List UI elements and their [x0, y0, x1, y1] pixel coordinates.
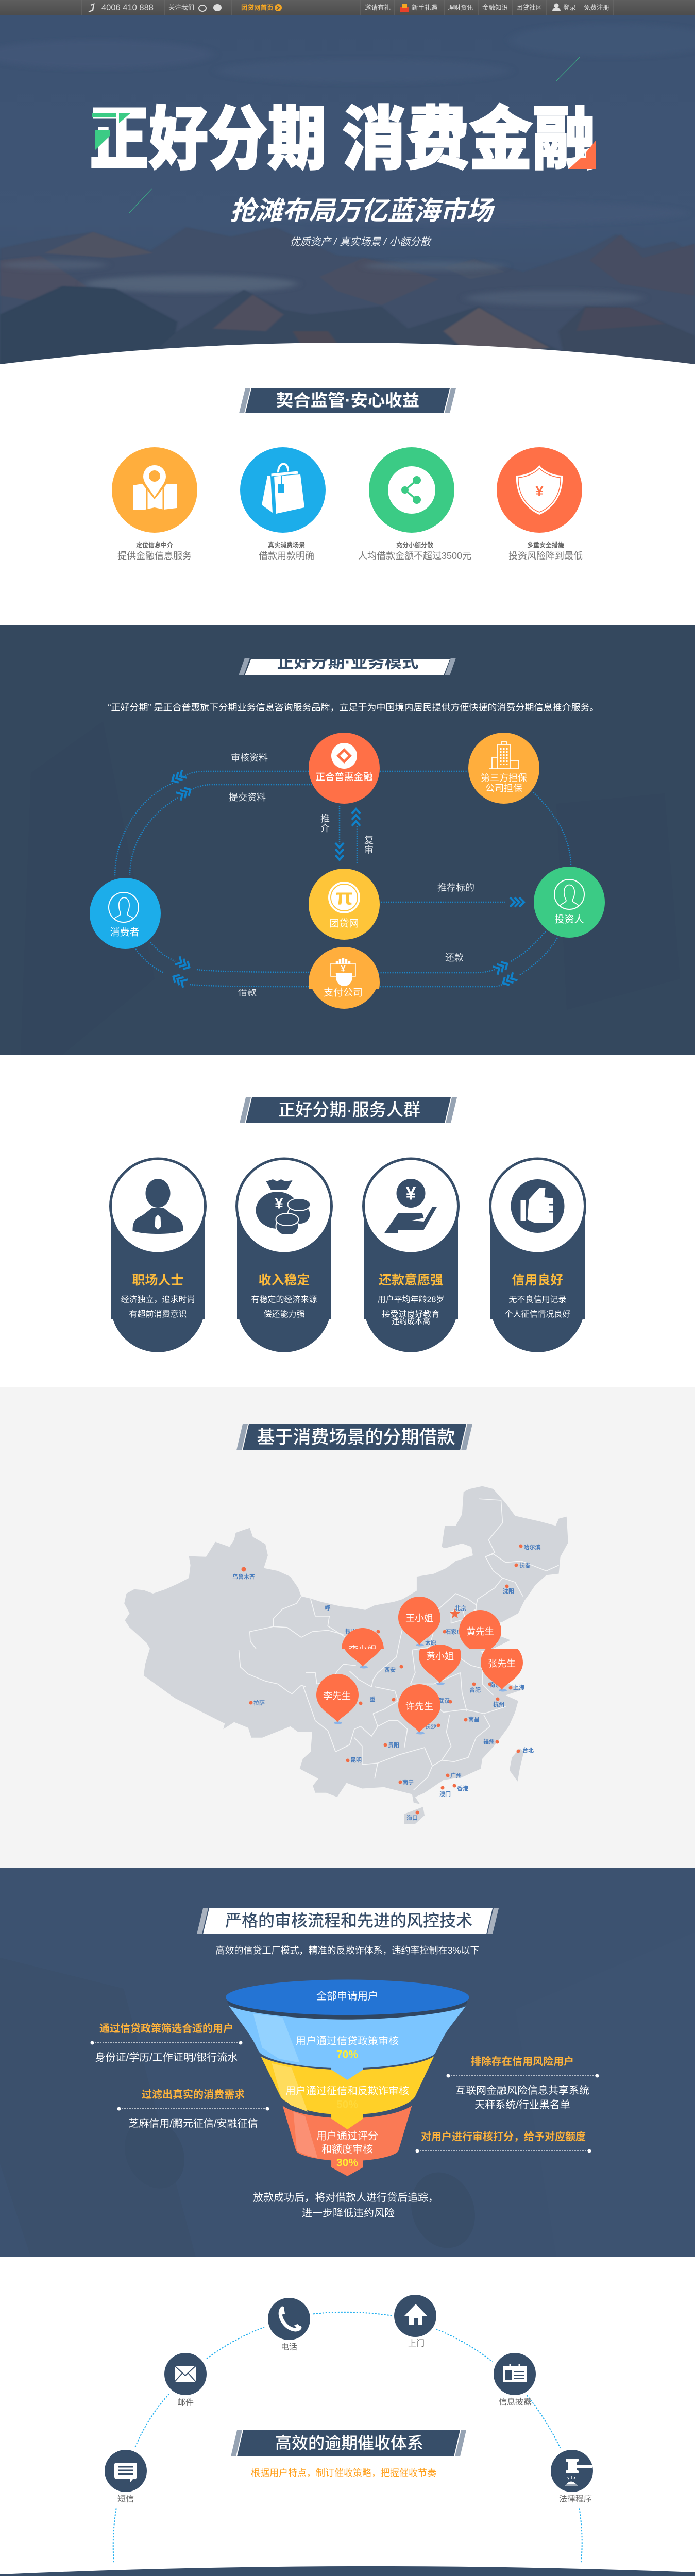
card: good credit	[490, 1159, 585, 1352]
flow labels: 还款	[445, 953, 464, 963]
text: location: 提供金融信息服务	[117, 551, 192, 561]
callout: scoring	[415, 2130, 591, 2153]
callout: exclude risk: 互联网金融风险信息共享系统	[455, 2084, 589, 2096]
text: real scenes: 借款用款明确	[259, 551, 314, 561]
node: third party guarantor: 第三方担保	[481, 773, 527, 783]
method: legal	[551, 2450, 593, 2504]
funnel: 70%	[336, 2048, 358, 2061]
city markers: 长沙	[425, 1723, 436, 1730]
heading banner: 正好分期·业务模式	[277, 653, 418, 671]
callout: real demand: 过滤出真实的消费需求	[142, 2088, 245, 2100]
top navigation bar: 邀请有礼	[365, 4, 391, 11]
hero title: 正好分期	[90, 101, 327, 178]
pin: li sir	[316, 1674, 359, 1724]
city markers: 杭州	[493, 1701, 504, 1708]
pin: li miss	[342, 1628, 384, 1668]
funnel: 用户通过征信和反欺诈审核	[285, 2085, 409, 2097]
city markers: 南宁	[402, 1778, 414, 1786]
callout: exclude risk: 天秤系统/行业黑名单	[474, 2099, 570, 2111]
funnel: 30%	[336, 2157, 358, 2169]
city markers: 哈尔滨	[523, 1544, 541, 1551]
city markers: 广州	[450, 1772, 462, 1779]
icon: hand with yen: ¥	[405, 1183, 416, 1204]
flow labels: 审	[364, 845, 374, 855]
card: stable income: 偿还能力强	[263, 1310, 305, 1319]
city markers: 香港	[457, 1785, 468, 1792]
icon: hand with yen	[384, 1179, 437, 1233]
node: tuandai	[309, 869, 380, 940]
pin: zhang: 张先生	[488, 1658, 516, 1669]
icon: shopping bag	[240, 447, 326, 533]
closing text	[253, 2192, 438, 2219]
panel: hero	[0, 0, 695, 371]
intro paragraph: “正好分期” 是正合普惠旗下分期业务信息咨询服务品牌，立足于为中国境内居民提供方便快捷的消费分期信息推介服务。	[108, 703, 599, 713]
card: stable income	[237, 1159, 332, 1352]
icon: user	[552, 3, 561, 11]
icon: money bag: ¥	[275, 1195, 283, 1212]
heading banner: 正好分期·服务人群	[278, 1100, 420, 1119]
text: small diversified	[358, 541, 471, 561]
card: professionals: 经济独立，追求时尚	[121, 1295, 195, 1304]
node: tuandai: 团贷网	[329, 918, 359, 929]
city markers	[232, 1544, 541, 1821]
method: legal: 法律程序	[559, 2495, 592, 2504]
node: zhenghe puhui	[309, 733, 380, 804]
text: location: 定位信息中介	[136, 541, 173, 549]
method: visit: 上门	[408, 2339, 425, 2348]
pin: huang sir: 黄先生	[466, 1626, 494, 1637]
icon: businessman	[133, 1179, 183, 1234]
card: repayment willingness: 接受过良好教育	[382, 1310, 440, 1319]
icon: gift	[400, 4, 409, 12]
top navigation bar: 登录	[563, 4, 576, 11]
top navigation bar	[0, 0, 695, 15]
card: professionals	[110, 1159, 205, 1352]
china map	[124, 1486, 568, 1824]
city markers: 贵阳	[388, 1741, 399, 1749]
node: payment company: 支付公司	[324, 987, 363, 998]
panel: target customers	[109, 1097, 586, 1352]
method: sms	[105, 2450, 147, 2504]
hero title: 消费金融	[342, 101, 596, 178]
card: good credit: 信用良好	[512, 1273, 564, 1287]
icon: arrow circle	[275, 4, 282, 11]
flow labels: 复	[364, 835, 374, 845]
callout: scoring: 对用户进行审核打分，给予对应额度	[421, 2130, 586, 2143]
card: stable income: 有稳定的经济来源	[251, 1295, 317, 1304]
pin: wang	[398, 1597, 440, 1647]
card: good credit: 个人征信情况良好	[504, 1310, 571, 1319]
top navigation bar: 关注我们	[168, 4, 194, 11]
city markers: 呼	[325, 1605, 331, 1612]
text: real scenes	[259, 541, 314, 561]
city markers: 南昌	[468, 1716, 480, 1723]
panel: consumer scenario map	[0, 1387, 695, 1868]
method: disclosure: 信息披露	[499, 2398, 532, 2407]
flow labels	[229, 753, 474, 997]
flow lines	[115, 771, 571, 987]
icon: shield	[497, 447, 582, 533]
city markers: 南京	[489, 1681, 501, 1688]
callout: real demand: 芝麻信用/鹏元征信/安融征信	[128, 2117, 258, 2129]
callout: credit policy	[91, 2022, 242, 2063]
icon: money bag	[256, 1179, 310, 1235]
node: investor	[534, 867, 605, 938]
node: third party guarantor	[468, 733, 539, 804]
method: phone	[268, 2298, 310, 2351]
node: payment company: ¥	[341, 963, 346, 974]
panel: risk control funnel	[0, 1868, 695, 2257]
city markers: 澳门	[439, 1790, 451, 1798]
pin: huang sir	[459, 1610, 501, 1649]
callout: credit policy: 身份证/学历/工作证明/银行流水	[95, 2052, 238, 2063]
top navigation bar: 4006 410 888	[101, 3, 154, 12]
callout: real demand	[117, 2088, 269, 2129]
heading banner: 严格的审核流程和先进的风控技术	[225, 1911, 472, 1930]
pin: zhang	[481, 1649, 523, 1692]
top navigation bar: 理财资讯	[448, 4, 474, 11]
card: repayment willingness: 违约成本高	[392, 1317, 430, 1326]
flow labels: 提交资料	[229, 792, 266, 803]
card: stable income: 收入稳定	[258, 1273, 310, 1287]
city markers: 福州	[483, 1738, 495, 1745]
pin: huang miss	[419, 1645, 461, 1685]
callout: exclude risk: 排除存在信用风险用户	[471, 2055, 574, 2067]
icon: phone	[89, 4, 94, 12]
closing text: 放款成功后，将对借款人进行贷后追踪，	[253, 2192, 438, 2204]
node: tuandai: π	[335, 884, 353, 910]
panel: safety benefits	[0, 371, 695, 625]
top navigation bar: 团贷网首页	[241, 4, 274, 11]
city markers: 海口	[406, 1814, 418, 1821]
icon: map pin	[112, 447, 197, 533]
subtitle: 根据用户特点，制订催收策略，把握催收节奏	[251, 2468, 436, 2478]
footer	[0, 2566, 695, 2576]
closing text: 进一步降低违约风险	[302, 2207, 395, 2219]
flow labels: 审核资料	[231, 753, 268, 763]
hero subtitle: 抢滩布局万亿蓝海市场	[230, 196, 495, 226]
heading banner	[236, 1424, 472, 1450]
hero tagline: 优质资产 / 真实场景 / 小额分散	[290, 236, 432, 248]
city markers: 西安	[384, 1666, 396, 1673]
pin: li sir: 李先生	[323, 1691, 351, 1701]
intro text: 高效的信贷工厂模式，精准的反欺诈体系，违约率控制在3%以下	[215, 1945, 480, 1956]
heading banner	[239, 388, 456, 413]
city markers: 昆明	[350, 1757, 362, 1764]
text: safety measures: 投资风险降到最低	[508, 551, 583, 561]
city markers: 合肥	[469, 1686, 481, 1693]
funnel: 全部申请用户	[316, 1990, 378, 2002]
collection arc	[113, 2312, 582, 2563]
top navigation bar: 免费注册	[584, 4, 609, 11]
flow labels: 借款	[238, 987, 257, 997]
method: email: 邮件	[177, 2398, 194, 2407]
hero title	[90, 101, 596, 178]
text: safety measures: 多重安全措施	[527, 541, 564, 549]
card: professionals: 有超前消费意识	[129, 1309, 187, 1319]
text: safety measures	[508, 541, 583, 561]
flow labels: 推荐标的	[437, 883, 474, 893]
pin: xu: 许先生	[405, 1701, 433, 1711]
node: consumer	[90, 878, 161, 949]
card: repayment willingness	[364, 1159, 459, 1352]
panel: overdue collection	[0, 2257, 695, 2576]
text: small diversified: 人均借款金额不超过3500元	[358, 551, 471, 561]
text: small diversified: 充分小额分散	[396, 541, 433, 549]
heading banner: 高效的逾期催收体系	[275, 2434, 423, 2452]
method: disclosure	[494, 2353, 536, 2407]
callout: credit policy: 通过信贷政策筛选合适的用户	[99, 2022, 233, 2035]
city markers: 银川	[345, 1628, 357, 1635]
city markers: 台北	[522, 1747, 534, 1754]
heading banner	[240, 1097, 457, 1123]
method: email	[164, 2353, 207, 2407]
funnel	[226, 1980, 469, 2176]
city markers: 太原	[425, 1639, 436, 1646]
icon: share	[369, 447, 454, 533]
flow arrows	[170, 770, 524, 988]
icon: wechat	[213, 4, 222, 11]
city markers: 北京	[455, 1604, 466, 1612]
pin: xu	[398, 1684, 440, 1734]
node: consumer: 消费者	[110, 926, 140, 938]
city markers: 重	[370, 1696, 375, 1703]
top navigation bar: 新手礼遇	[412, 4, 437, 11]
panel: business model	[0, 625, 695, 1055]
city markers: 长春	[519, 1562, 531, 1569]
heading banner: 契合监管·安心收益	[276, 391, 419, 410]
meteor streaks	[129, 57, 580, 213]
card: repayment willingness: 用户平均年龄28岁	[378, 1295, 444, 1304]
icon: thumbs up	[511, 1179, 565, 1233]
city markers: 乌鲁木齐	[232, 1573, 255, 1580]
funnel: 用户通过信贷政策审核	[296, 2035, 399, 2047]
card: good credit: 无不良信用记录	[508, 1295, 567, 1304]
city markers: 武汉	[438, 1697, 450, 1704]
top navigation bar: 团贷社区	[516, 4, 542, 11]
flow labels: 介	[320, 823, 330, 834]
node: zhenghe puhui: 正合普惠金融	[315, 772, 373, 782]
pin: huang miss: 黄小姐	[426, 1651, 454, 1662]
city markers: 石家庄	[445, 1628, 463, 1635]
node: third party guarantor: 公司担保	[485, 783, 522, 793]
flow labels: 推	[320, 814, 330, 824]
text: location	[117, 541, 192, 561]
callout: exclude risk	[446, 2055, 599, 2111]
card: professionals: 职场人士	[132, 1273, 184, 1287]
city markers: 拉萨	[253, 1699, 265, 1706]
icon: shield: ¥	[535, 483, 544, 499]
heading banner: 基于消费场景的分期借款	[257, 1427, 455, 1448]
pin: wang: 王小姐	[405, 1613, 433, 1623]
node: investor: 投资人	[554, 914, 584, 925]
heading banner	[197, 1908, 499, 1934]
pin: li miss: 李小姐	[349, 1645, 377, 1655]
funnel: 50%	[336, 2099, 358, 2110]
card: repayment willingness: 还款意愿强	[379, 1273, 443, 1287]
node: payment company	[309, 947, 380, 1009]
method: sms: 短信	[117, 2495, 134, 2504]
icon: weibo	[199, 5, 206, 11]
heading banner	[231, 2430, 466, 2456]
method: phone: 电话	[281, 2342, 297, 2351]
funnel: 用户通过评分	[316, 2130, 378, 2142]
city markers: 上海	[513, 1684, 524, 1691]
method: visit	[394, 2295, 436, 2348]
text: real scenes: 真实消费场景	[268, 541, 305, 549]
city markers: 沈阳	[503, 1587, 514, 1595]
funnel: 和额度审核	[321, 2143, 373, 2155]
heading banner	[239, 658, 456, 675]
top navigation bar: 金融知识	[482, 4, 508, 11]
